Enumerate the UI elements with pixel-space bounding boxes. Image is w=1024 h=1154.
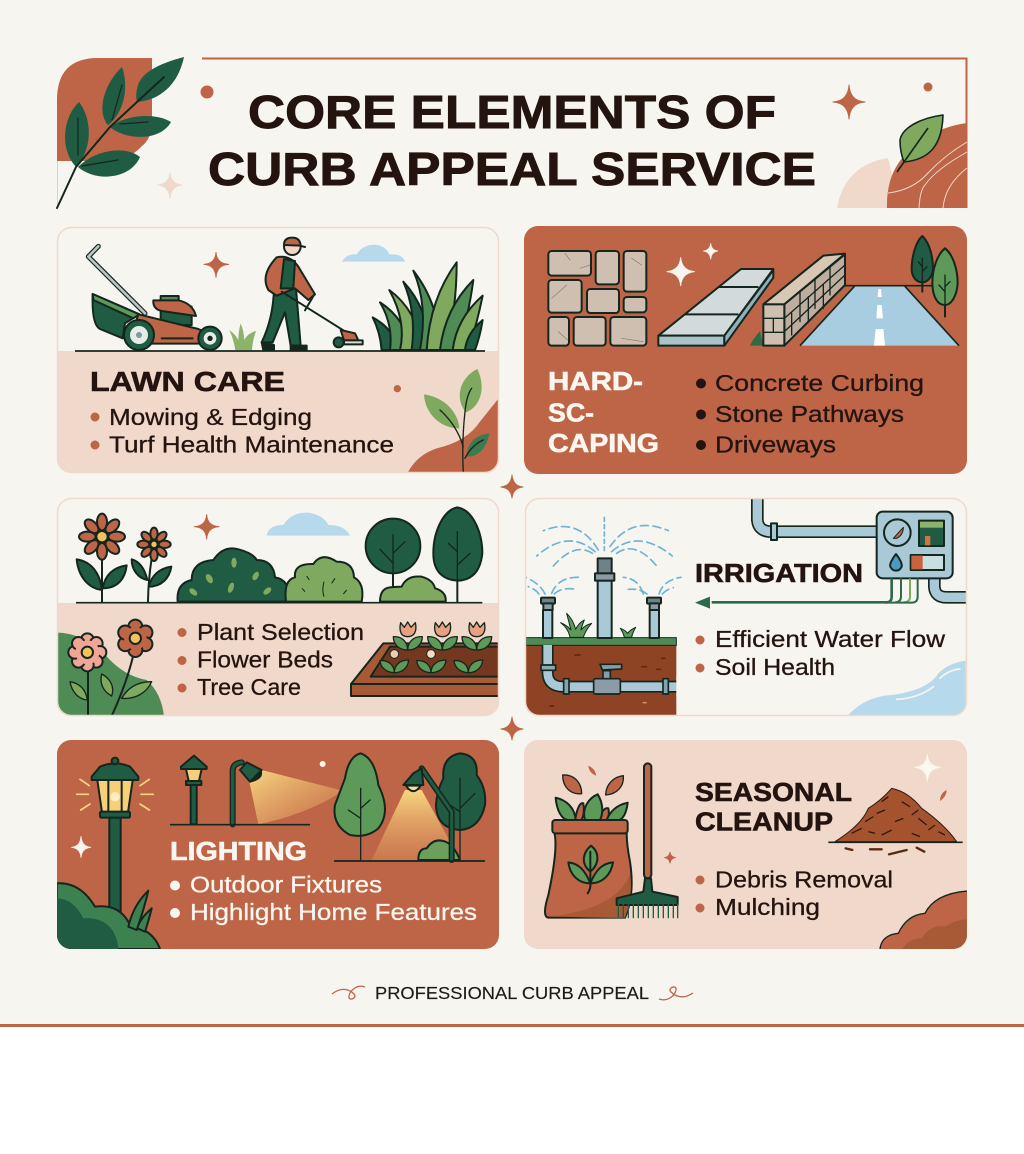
- icon: lawn mower: [88, 246, 222, 350]
- hardscaping heading: CAPING: [548, 428, 659, 458]
- title: [208, 86, 816, 195]
- lawn care illustration: [75, 238, 500, 473]
- panel: seasonal cleanup: [524, 740, 968, 950]
- irrigation heading: IRRIGATION: [695, 558, 863, 588]
- icon: small bush: [418, 840, 460, 860]
- title: CORE ELEMENTS OF: [248, 86, 776, 138]
- footer label: PROFESSIONAL CURB APPEAL: [375, 983, 649, 1003]
- header left rule: [56, 160, 58, 208]
- green hill: [57, 633, 164, 717]
- dot: [394, 385, 401, 392]
- icon: cloud: [267, 513, 350, 536]
- panel: plants: [57, 498, 500, 717]
- decorative dot: [200, 86, 214, 98]
- icon: road: [800, 286, 959, 346]
- spotlight beam: [249, 770, 340, 824]
- seasonal list: Debris Removal: [715, 866, 893, 892]
- lawn care text: Turf Health Maintenance: [109, 432, 394, 458]
- icon: light rays: [77, 779, 153, 810]
- icon: raised flower bed: [351, 622, 500, 696]
- panel outline: irrigation: [526, 498, 966, 716]
- icon: concrete slab: [658, 269, 773, 346]
- irrigation bullets: [696, 636, 704, 672]
- corner hill: [407, 397, 500, 473]
- hardscaping list: Stone Pathways: [715, 401, 904, 427]
- icon: green tree: [334, 753, 385, 860]
- seasonal heading: SEASONAL: [695, 777, 852, 807]
- panel: irrigation: [525, 495, 967, 717]
- icon: grass band: [526, 638, 676, 645]
- icon: trees: [912, 236, 958, 317]
- hardscaping list: [696, 370, 924, 458]
- seasonal list: Mulching: [715, 894, 820, 920]
- lighting text: Outdoor Fixtures: [190, 872, 382, 898]
- icon: mulch bag: [545, 820, 632, 918]
- icon: cloud: [342, 245, 405, 262]
- lighting text: [170, 836, 477, 925]
- panel: lighting: [57, 740, 499, 949]
- icon: flower one: [77, 514, 127, 602]
- header blob left: [57, 58, 152, 161]
- lawn care text: LAWN CARE: [90, 366, 285, 397]
- icon: soil: [526, 645, 676, 717]
- second spotlight beam: [372, 790, 453, 860]
- icon: water pool: [848, 661, 966, 717]
- icon: grass tufts: [561, 613, 636, 637]
- icon: small grass: [229, 323, 256, 350]
- ground line: [75, 350, 485, 352]
- icon: star: [194, 515, 219, 539]
- cover past soil edge: [676, 677, 683, 697]
- icon: brick wall: [750, 254, 845, 346]
- icon: light bush: [286, 557, 362, 602]
- irrigation list: [715, 626, 945, 680]
- icon: wires and arrow: [695, 578, 918, 609]
- divider star: [501, 475, 523, 498]
- seasonal list: [715, 866, 893, 920]
- plants bullets: [178, 628, 186, 692]
- lighting illustration: [57, 753, 485, 949]
- water spray arcs: [526, 517, 681, 594]
- icon: dark tree: [436, 753, 485, 860]
- icon: underground pipe: [541, 645, 678, 694]
- footer: [332, 983, 693, 1003]
- lighting text: LIGHTING: [170, 836, 307, 866]
- divider star: [501, 717, 523, 740]
- hardscaping heading: SC-: [548, 398, 594, 428]
- irrigation list: Efficient Water Flow: [715, 626, 945, 652]
- icon: green leaf: [897, 115, 943, 172]
- icon: worker: [262, 238, 363, 350]
- icon: corner cloud: [880, 891, 968, 950]
- header hill right: [837, 123, 967, 208]
- icon: pipe to controller: [757, 495, 967, 597]
- hardscaping list: Driveways: [715, 432, 836, 458]
- icon: stone pavers: [548, 251, 646, 346]
- icon: small path light: [181, 756, 207, 824]
- icon: dark bush: [178, 548, 291, 602]
- hardscaping list: Concrete Curbing: [715, 370, 924, 396]
- icon: flower two: [132, 528, 171, 602]
- icon: star: [72, 837, 91, 857]
- icon: tall grass: [373, 262, 483, 350]
- icon: leafy branch: [57, 57, 184, 208]
- hardscaping heading: [548, 372, 658, 452]
- hardscaping illustration: [548, 236, 959, 346]
- icon: sprinklers: [541, 558, 661, 638]
- panel outline: lawn care: [58, 228, 498, 472]
- panel outline: plants: [58, 498, 498, 716]
- irrigation illustration: [526, 495, 967, 717]
- plants illustration: [57, 507, 500, 717]
- icon: leaves in bag: [556, 794, 628, 820]
- star right: [833, 85, 865, 119]
- seasonal illustration: [545, 755, 968, 950]
- icon: small star: [665, 852, 675, 863]
- lawn care text: [92, 372, 394, 453]
- panel: lawn care: [57, 227, 500, 473]
- soil flecks: [550, 655, 665, 706]
- seasonal heading: [695, 777, 852, 836]
- lawn care text: Mowing & Edging: [109, 404, 312, 430]
- icon: falling leaves: [563, 766, 947, 801]
- icon: mulch pile: [828, 788, 963, 854]
- seasonal heading: CLEANUP: [695, 806, 833, 836]
- decorative dot right: [924, 82, 932, 92]
- ground line: [170, 822, 310, 827]
- footer swirl right: [659, 987, 693, 1000]
- icon: star: [204, 252, 229, 277]
- icon: lamp post: [92, 758, 138, 913]
- icon: stars: [667, 244, 718, 286]
- icon: rake: [617, 763, 678, 918]
- icon: star: [915, 755, 940, 781]
- icon: pink and orange flowers: [68, 620, 155, 716]
- icon: spotlight: [233, 762, 262, 824]
- plants list: [197, 619, 364, 700]
- panel: hardscaping: [524, 226, 967, 474]
- icon: bushes: [57, 883, 160, 949]
- hardscaping heading: HARD-: [548, 366, 643, 396]
- ground line: [76, 602, 482, 604]
- plants list: Plant Selection: [197, 619, 364, 645]
- plants lower band: [57, 603, 499, 716]
- irrigation list: Soil Health: [715, 654, 835, 680]
- icon: second spotlight: [403, 768, 452, 860]
- icon: round tree: [364, 518, 422, 586]
- ground line: [334, 858, 485, 863]
- header: [57, 57, 967, 208]
- icon: controller box: [877, 512, 953, 578]
- lighting text: Highlight Home Features: [190, 899, 477, 925]
- header frame: [202, 58, 966, 208]
- dot: [320, 761, 326, 767]
- icon: plant sprout: [424, 369, 489, 473]
- plants list: Flower Beds: [197, 646, 333, 672]
- footer swirl left: [332, 986, 365, 999]
- pale star: [158, 173, 182, 198]
- title: CURB APPEAL SERVICE: [208, 143, 816, 195]
- plants list: Tree Care: [197, 674, 301, 700]
- lawn care bullets: [90, 412, 100, 450]
- seasonal bullets: [696, 876, 704, 912]
- icon: tall tree: [433, 507, 482, 602]
- icon: small bush: [380, 576, 446, 602]
- lawn care lower band: [57, 351, 499, 473]
